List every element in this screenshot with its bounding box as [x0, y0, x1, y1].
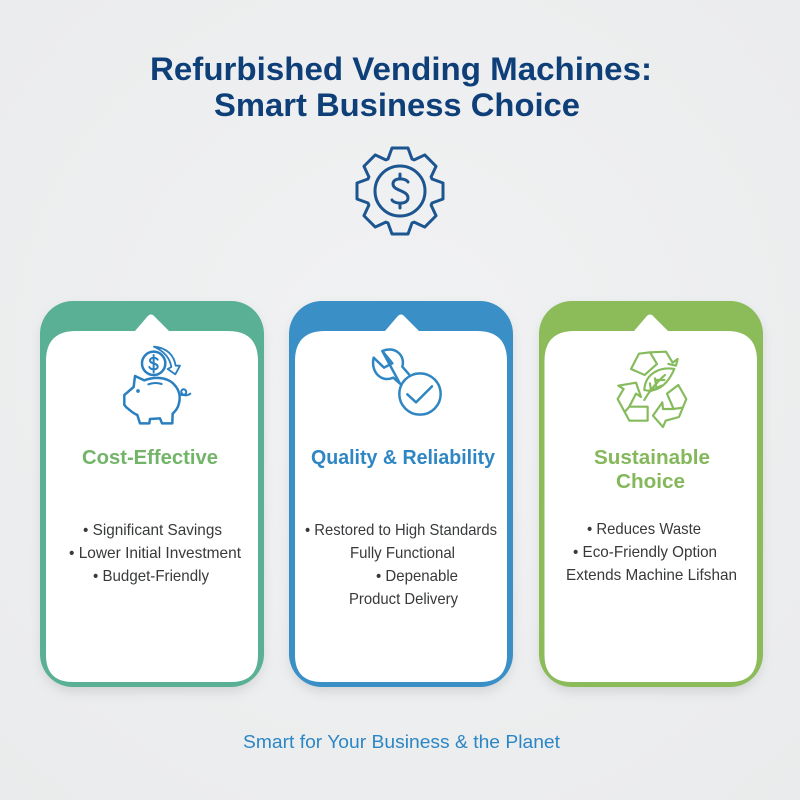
heading: quality and reliability: Quality & Reliability [311, 447, 496, 469]
text: cost-effective bullets: • Lower Initial Investment [69, 545, 242, 562]
title [150, 51, 652, 123]
text: sustainable bullets: Extends Machine Lifshan [566, 567, 737, 584]
heading: sustainable choice: Choice [616, 471, 685, 493]
text: cost-effective bullets: • Budget-Friendly [93, 568, 209, 585]
text: cost-effective bullets: • Significant Savings [83, 522, 222, 539]
panel: cost-effective [40, 301, 264, 691]
heading: sustainable choice [594, 447, 710, 493]
text: quality bullets: • Restored to High Standards [305, 522, 497, 539]
text: sustainable bullets: • Eco-Friendly Option [573, 544, 717, 561]
text: quality bullets: • Depenable [376, 568, 458, 585]
text: quality bullets: Fully Functional [350, 545, 455, 562]
icon: wrench and check circle [373, 349, 441, 415]
text: cost-effective bullets [69, 522, 242, 585]
panel: quality and reliability [289, 301, 513, 691]
title: Smart Business Choice [214, 87, 580, 123]
text: quality bullets [305, 522, 497, 608]
panel: sustainable choice [539, 301, 763, 691]
title: Refurbished Vending Machines: [150, 51, 652, 87]
footer tagline: Smart for Your Business & the Planet [243, 732, 560, 752]
heading: cost-effective: Cost-Effective [82, 447, 218, 469]
text: sustainable bullets [566, 521, 737, 584]
icon: gear with dollar sign [357, 148, 443, 234]
text: sustainable bullets: • Reduces Waste [587, 521, 701, 538]
heading: sustainable choice: Sustainable [594, 447, 710, 469]
icon: piggy bank with coin [124, 347, 190, 423]
text: quality bullets: Product Delivery [349, 591, 458, 608]
icon: recycling arrows with leaf [618, 352, 686, 427]
